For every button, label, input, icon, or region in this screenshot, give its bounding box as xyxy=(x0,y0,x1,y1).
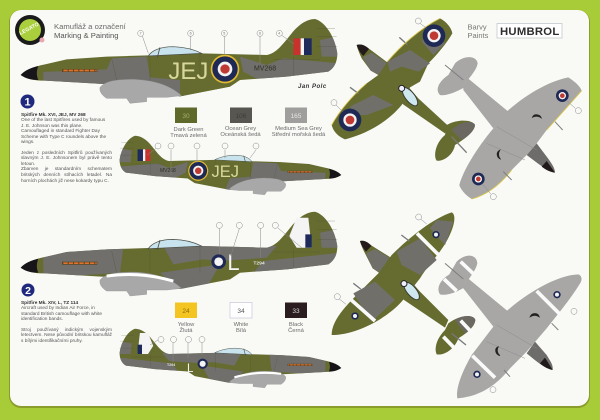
badge: number 1: 1 xyxy=(24,96,31,108)
swatch group 1: Humbrol 30, 106, 165: Tmavá zelená xyxy=(170,133,207,139)
top view B: grey under surface, JEJ xyxy=(438,57,582,200)
text block: scheme 1 description: Spitfire Mk. XVI, JEJ, MV 268 xyxy=(21,112,86,118)
aircraft 1: side view JEJ: 5 xyxy=(223,32,225,36)
aircraft 2 markings: JEJ xyxy=(212,163,239,181)
text block: scheme 2 description: standard British camouflage with white xyxy=(21,312,102,317)
callouts xyxy=(138,30,294,63)
swatch group 2: Humbrol 24, 34, 33: Black xyxy=(289,322,303,328)
aircraft 2: side view JEJ, right-facing xyxy=(118,136,341,195)
text block: scheme 1 description: Jeden z posledních Spitfirů používaných slavným J. E. Johnsonem byl právě tento letoun. xyxy=(21,151,112,167)
icon: Legato logo: LEGATO xyxy=(19,22,40,37)
swatch group 1: Humbrol 30, 106, 165: Oceánská šedá xyxy=(220,132,261,138)
callouts xyxy=(483,100,581,200)
swatch group 1: Humbrol 30, 106, 165: Ocean Grey xyxy=(225,126,256,132)
roundel xyxy=(211,55,239,83)
swatch group 2: Humbrol 24, 34, 33: Bílá xyxy=(236,328,247,334)
heading: paints label: Paints xyxy=(468,31,489,40)
top view A: green upper surface, JEJ xyxy=(331,18,475,161)
aircraft 3: side view L xyxy=(21,212,340,296)
swatch group 1: Humbrol 30, 106, 165: Dark Green xyxy=(174,127,203,133)
swatch group 2: Humbrol 24, 34, 33: 24 xyxy=(182,308,190,315)
swatch group 2: Humbrol 24, 34, 33: 33 xyxy=(292,308,300,315)
code letters JEJ: JEJ xyxy=(168,58,208,85)
swatch group 1: Humbrol 30, 106, 165 xyxy=(170,108,326,139)
text block: scheme 1 description: J. E. Johnson was this plane. xyxy=(21,124,83,129)
text block: scheme 2 description: identification bands. xyxy=(21,317,63,322)
callouts xyxy=(334,214,427,304)
wing band xyxy=(107,275,173,281)
swatch group 2: Humbrol 24, 34, 33 xyxy=(175,302,307,334)
top view D: grey under surface, L xyxy=(438,256,582,398)
text block: scheme 1 description: Scheme with Type C roundels above the xyxy=(21,135,106,140)
text block: scheme 1 description: Camouflaged in standard Fighter Day xyxy=(21,129,100,134)
heading: paints label xyxy=(468,22,489,40)
icon: Legato logo xyxy=(15,15,45,45)
heading: marking and painting xyxy=(54,22,127,40)
serial MV268: MV268 xyxy=(254,65,276,72)
roundels xyxy=(473,291,561,378)
aircraft 2 markings: MV268 xyxy=(160,168,176,174)
heading: marking and painting: Marking & Painting xyxy=(54,31,119,40)
aircraft 1: side view JEJ: 6 xyxy=(259,32,261,36)
aircraft 2 markings xyxy=(147,143,259,181)
aircraft 1: side view JEJ: 6 xyxy=(190,32,192,36)
aircraft 4 markings: T294 xyxy=(167,363,175,367)
badge: number 2 xyxy=(22,284,34,297)
aircraft 4 markings: L xyxy=(187,363,194,375)
heading: marking and painting: Kamufláž a označení xyxy=(54,22,127,31)
swatch group 2: Humbrol 24, 34, 33: White xyxy=(234,322,248,328)
identification bands xyxy=(351,233,473,348)
identification bands xyxy=(444,262,560,378)
roundel xyxy=(211,254,226,269)
aircraft 1: side view JEJ: 7 xyxy=(140,32,142,36)
text block: scheme 1 description: wings. xyxy=(21,140,34,145)
signature: Jan Polc xyxy=(298,84,327,90)
aircraft 1: side view JEJ: 4 xyxy=(278,32,280,36)
swatch group 1: Humbrol 30, 106, 165: 106 xyxy=(236,113,247,120)
top view C: green upper surface, L xyxy=(332,212,475,354)
brand box: Humbrol: HUMBROL xyxy=(500,26,559,38)
code letter L: L xyxy=(227,250,240,275)
text block: scheme 1 description: One of the last Spitfires used by famous xyxy=(21,118,105,123)
text block: scheme 2 description: Spitfire Mk. XIV, L, TZ 114 xyxy=(21,300,78,306)
fin flash xyxy=(289,218,312,248)
swatch group 2: Humbrol 24, 34, 33: Žlutá xyxy=(180,326,193,334)
swatch group 1: Humbrol 30, 106, 165: Medium Sea Grey xyxy=(275,126,322,132)
swatch group 1: Humbrol 30, 106, 165: 30 xyxy=(182,113,190,120)
badge: number 2: 2 xyxy=(25,285,31,297)
roundels xyxy=(351,231,440,320)
callouts xyxy=(216,222,302,258)
serial: T294 xyxy=(253,260,265,266)
callouts xyxy=(490,308,577,393)
swatch group 1: Humbrol 30, 106, 165: Střední mořská šedá xyxy=(272,132,326,138)
roundels xyxy=(339,24,445,131)
badge: number 1 xyxy=(20,94,34,108)
aircraft 1: side view JEJ xyxy=(21,19,340,103)
swatch group 2: Humbrol 24, 34, 33: 34 xyxy=(237,308,245,315)
heading: paints label: Barvy xyxy=(468,22,487,32)
roundels xyxy=(472,89,569,185)
aircraft 4: side view L, right-facing xyxy=(118,329,341,388)
text block: scheme 2 description: Stroj používaný indickým vojenským letectvem. Nese původní britskou kamufláž s bílými identifikačními pruhy. xyxy=(21,328,112,344)
text block: scheme 2 description xyxy=(21,300,112,344)
swatch group 2: Humbrol 24, 34, 33: Yellow xyxy=(178,322,195,328)
text block: scheme 1 description: Zbarven je standardním schematem britských denních stíhacích letadel. Na horních plochách již nese kokardy typu C. xyxy=(21,167,112,184)
text block: scheme 2 description: Aircraft used by Indian Air Force, in xyxy=(21,306,95,311)
swatch group 1: Humbrol 30, 106, 165: 165 xyxy=(291,113,302,120)
aircraft 4 markings xyxy=(150,336,205,375)
text block: scheme 1 description xyxy=(21,112,112,184)
fin flash xyxy=(293,38,312,55)
swatch group 2: Humbrol 24, 34, 33: Černá xyxy=(288,327,305,334)
callouts xyxy=(331,18,427,112)
